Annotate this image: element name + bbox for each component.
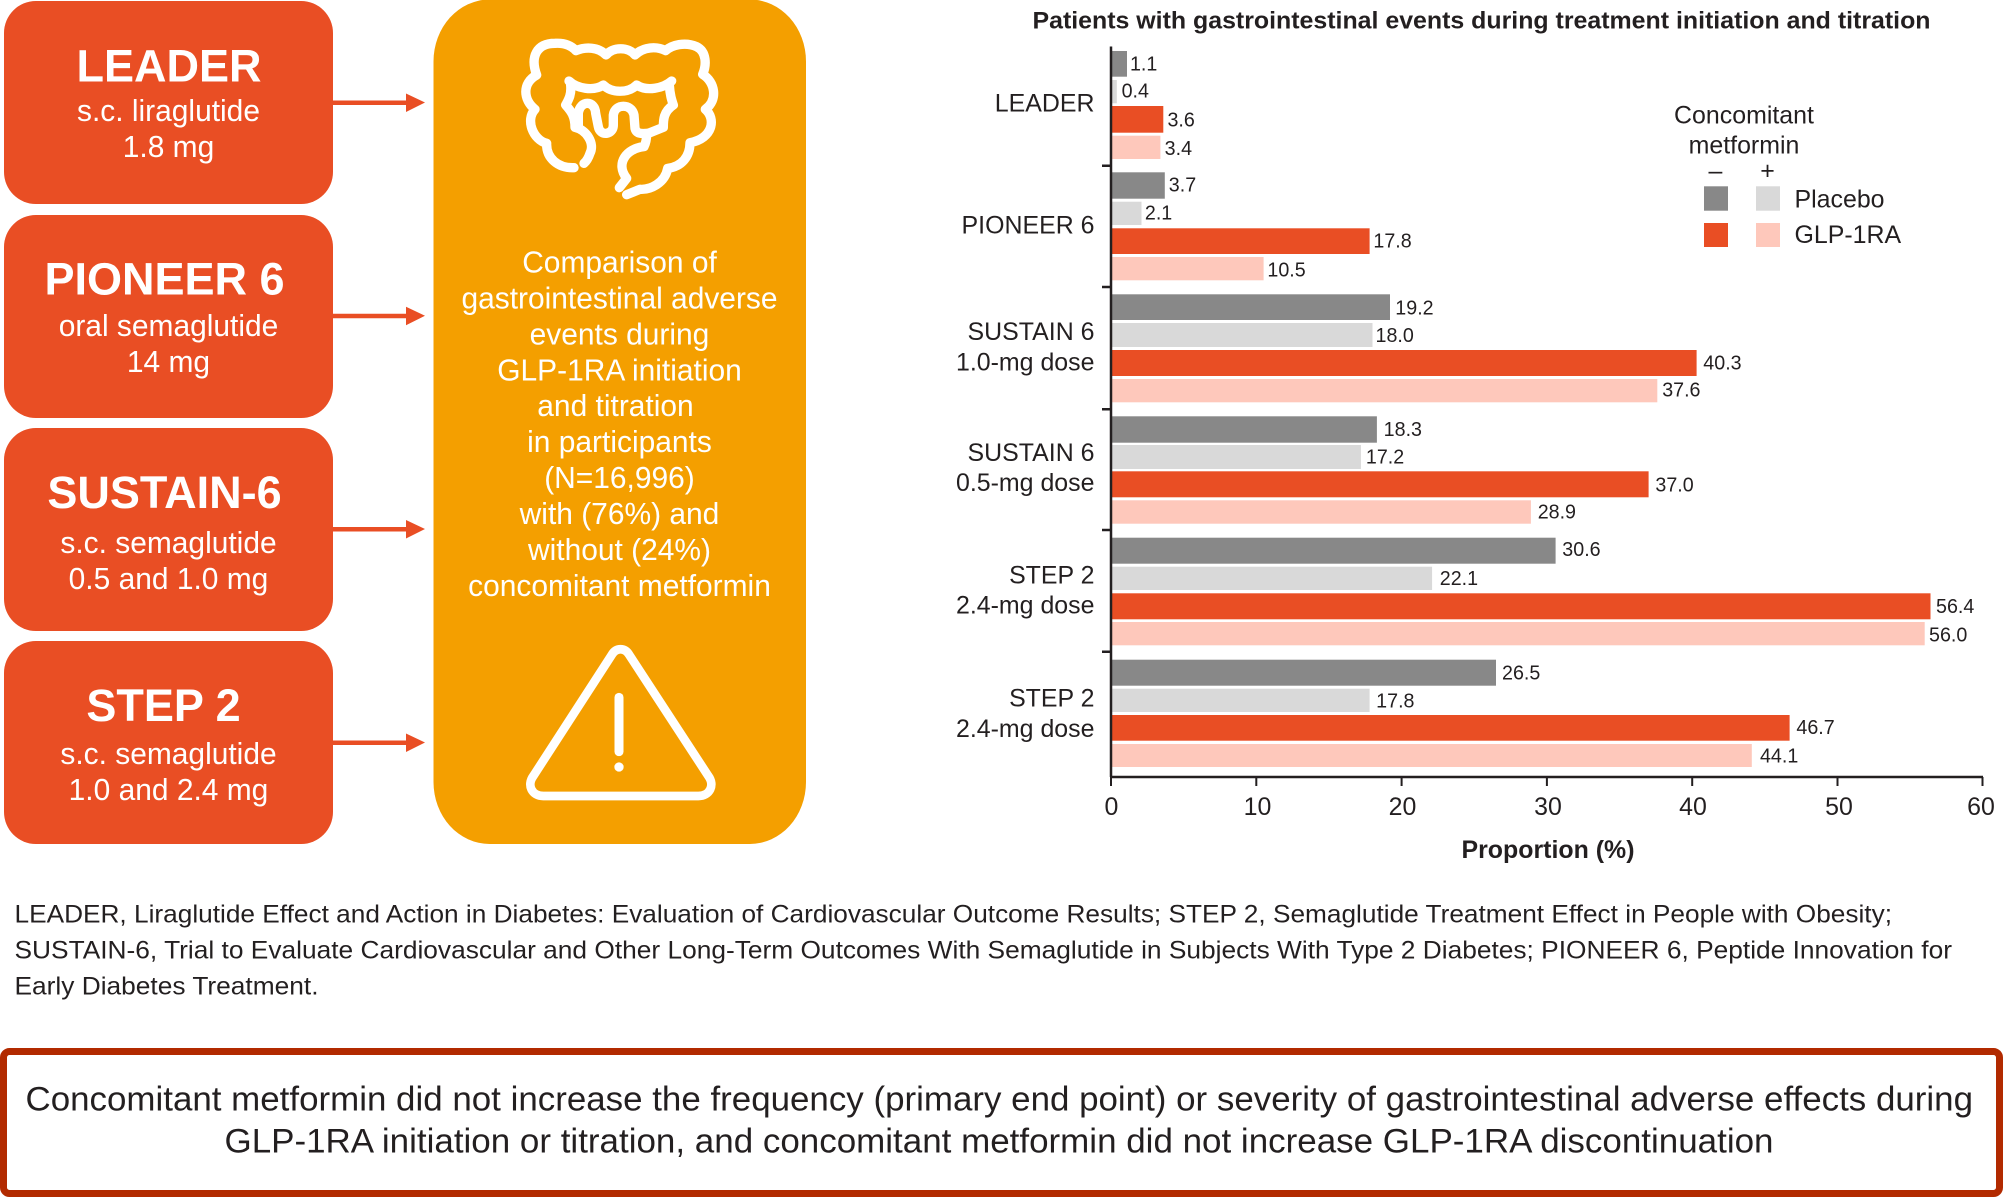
bars: LEADER: [1111, 51, 1195, 160]
bars: STEP 2 2.4-mg dose (second): 17.8: [1376, 690, 1415, 713]
x-axis tick labels: 30: [1534, 793, 1562, 821]
trial box: LEADER: s.c. liraglutide: [77, 95, 260, 128]
category labels: 1.0-mg dose: [956, 349, 1095, 377]
bars: SUSTAIN 6 1.0-mg dose: 19.2: [1395, 297, 1434, 319]
trial box: SUSTAIN-6: SUSTAIN-6: [47, 467, 282, 518]
x-axis tick labels: 20: [1389, 793, 1416, 821]
bars: STEP 2 2.4-mg dose (first): 30.6: [1562, 539, 1601, 561]
bars: STEP 2 2.4-mg dose (second): 46.7: [1796, 717, 1835, 739]
category labels: 2.4-mg dose: [956, 592, 1095, 620]
bars: STEP 2 2.4-mg dose (second): [1111, 660, 1835, 767]
footnote: SUSTAIN-6, Trial to Evaluate Cardiovascular and Other Long-Term Outcomes With Semaglutide in Subjects With Type 2 Diabetes; PIONEER 6, Peptide Innovation for: [14, 936, 1952, 964]
bars: SUSTAIN 6 1.0-mg dose: 18.0: [1375, 325, 1414, 347]
arrow: LEADER: [333, 94, 425, 112]
text: comparison description: in participants: [527, 426, 712, 459]
legend: Placebo: [1795, 185, 1885, 213]
category labels: SUSTAIN 6: [968, 318, 1095, 346]
icon: warning triangle: [530, 649, 711, 796]
bars: SUSTAIN 6 1.0-mg dose: 40.3: [1703, 352, 1742, 374]
arrow: STEP 2: [333, 734, 425, 752]
category labels: [956, 90, 1094, 743]
x-axis tick labels: [1105, 793, 1995, 821]
text: comparison description: gastrointestinal adverse: [461, 282, 778, 316]
trial box: PIONEER 6: [4, 215, 333, 418]
x-axis tick labels: 10: [1244, 793, 1271, 821]
bars: SUSTAIN 6 0.5-mg dose: 18.3: [1384, 419, 1422, 441]
panel: comparison: [434, 0, 806, 844]
bars: LEADER: 0.4: [1122, 80, 1149, 102]
footnote: LEADER, Liraglutide Effect and Action in Diabetes: Evaluation of Cardiovascular Outcome Results; STEP 2, Semaglutide Treatment Effect in People with Obesity;: [14, 900, 1892, 928]
bar chart: [956, 46, 1995, 864]
text: comparison description: and titration: [537, 390, 694, 423]
arrow: SUSTAIN-6: [333, 520, 425, 538]
text: comparison description: (N=16,996): [544, 462, 695, 495]
arrows: trials to comparison: [333, 94, 425, 752]
category labels: SUSTAIN 6: [968, 439, 1095, 467]
trial box: PIONEER 6: oral semaglutide: [59, 310, 278, 343]
bars: PIONEER 6: 10.5: [1267, 259, 1306, 282]
trial box: STEP 2: [4, 641, 333, 844]
legend: GLP-1RA: [1795, 221, 1901, 249]
legend: metformin: [1689, 131, 1799, 159]
trial box: LEADER: [4, 1, 333, 204]
legend: +: [1760, 157, 1775, 185]
bars: SUSTAIN 6 1.0-mg dose: 37.6: [1662, 379, 1701, 402]
bars: SUSTAIN 6 0.5-mg dose: [1111, 416, 1694, 524]
chart title: Patients with gastrointestinal events during treatment initiation and titration: [1032, 8, 1930, 34]
bars: STEP 2 2.4-mg dose (second): 44.1: [1760, 745, 1798, 767]
footnote: Early Diabetes Treatment.: [14, 972, 318, 1000]
x-axis tick labels: 0: [1105, 793, 1118, 821]
x-axis tick labels: 50: [1825, 793, 1853, 821]
category labels: STEP 2: [1009, 561, 1095, 589]
text: comparison description: GLP-1RA initiation: [497, 354, 742, 388]
x-axis tick labels: 40: [1679, 793, 1707, 821]
x-axis title: Proportion (%): [1461, 836, 1635, 864]
bars: STEP 2 2.4-mg dose (first): 56.4: [1936, 596, 1974, 618]
bars: LEADER: 1.1: [1130, 53, 1157, 76]
bars: STEP 2 2.4-mg dose (first): 22.1: [1440, 568, 1478, 590]
bars: SUSTAIN 6 0.5-mg dose: 37.0: [1655, 474, 1694, 497]
callout: conclusion: Concomitant metformin did not increase the frequency (primary end point) or severity of gastrointestinal adverse effects during: [26, 1080, 1973, 1118]
x-axis tick labels: 60: [1967, 793, 1995, 821]
text: comparison description: Comparison of: [522, 246, 717, 280]
legend: –: [1709, 157, 1722, 185]
trial box: LEADER: 1.8 mg: [123, 131, 214, 164]
trial box: STEP 2: s.c. semaglutide: [60, 738, 277, 771]
arrow: PIONEER 6: [333, 307, 425, 325]
callout: conclusion: GLP-1RA initiation or titration, and concomitant metformin did not increase GLP-1RA discontinuation: [224, 1122, 1774, 1160]
footnote: [14, 900, 1952, 1000]
text: comparison description: without (24%): [527, 534, 711, 567]
text: comparison description: [461, 246, 778, 603]
bars: STEP 2 2.4-mg dose (first): 56.0: [1929, 624, 1967, 647]
bars: PIONEER 6: [1111, 172, 1412, 282]
category labels: 2.4-mg dose: [956, 715, 1095, 743]
callout: conclusion: [4, 1052, 2000, 1194]
legend: [1674, 101, 1901, 249]
text: comparison description: with (76%) and: [519, 498, 719, 531]
bars: SUSTAIN 6 0.5-mg dose: 28.9: [1538, 501, 1576, 523]
bars: PIONEER 6: 17.8: [1373, 230, 1412, 253]
trial box: SUSTAIN-6: 0.5 and 1.0 mg: [69, 563, 268, 596]
trial box: PIONEER 6: PIONEER 6: [44, 254, 285, 304]
bars: STEP 2 2.4-mg dose (first): [1111, 538, 1974, 647]
trial box: LEADER: LEADER: [76, 40, 262, 92]
text: comparison description: events during: [530, 318, 709, 352]
trial box: SUSTAIN-6: s.c. semaglutide: [60, 527, 277, 560]
bars: PIONEER 6: 2.1: [1145, 202, 1172, 224]
category labels: 0.5-mg dose: [956, 469, 1095, 497]
category labels: PIONEER 6: [962, 211, 1095, 239]
trial box: SUSTAIN-6: [4, 428, 333, 631]
legend: Concomitant: [1674, 101, 1814, 129]
bars: LEADER: 3.6: [1168, 109, 1195, 132]
axes: [1102, 46, 1983, 786]
trial box: STEP 2: 1.0 and 2.4 mg: [69, 774, 268, 807]
bars: PIONEER 6: 3.7: [1169, 174, 1196, 197]
trial box: PIONEER 6: 14 mg: [127, 346, 210, 379]
bars: SUSTAIN 6 0.5-mg dose: 17.2: [1366, 446, 1404, 469]
category labels: STEP 2: [1009, 685, 1095, 713]
icon: intestine: [526, 43, 714, 195]
bars: LEADER: 3.4: [1165, 138, 1192, 160]
bars: SUSTAIN 6 1.0-mg dose: [1111, 294, 1742, 402]
bars: STEP 2 2.4-mg dose (second): 26.5: [1502, 662, 1540, 685]
panel: trial boxes: [4, 1, 333, 844]
category labels: LEADER: [995, 90, 1095, 118]
trial box: STEP 2: STEP 2: [86, 680, 241, 731]
text: comparison description: concomitant metformin: [468, 570, 771, 603]
